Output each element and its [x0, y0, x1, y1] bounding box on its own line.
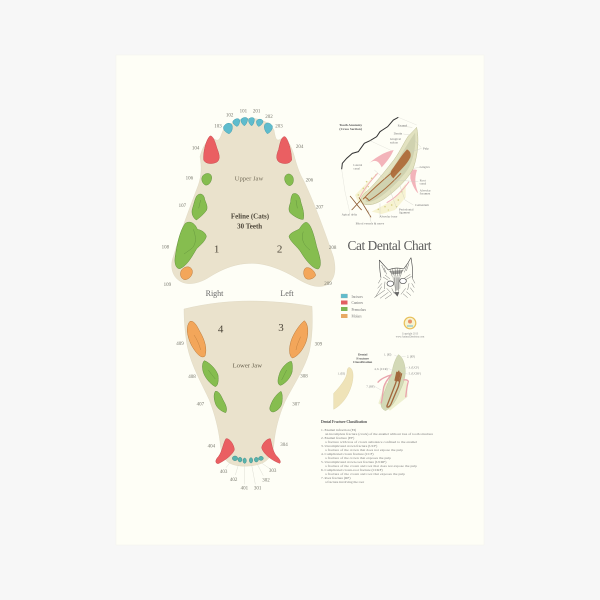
fracture labels: 2. (EF) [407, 355, 415, 359]
premolars green [202, 361, 292, 413]
list items: 6. Complicated crown-root fracture (CCRF) [321, 468, 384, 472]
lower tooth numbers: 309 [315, 342, 323, 347]
upper jaw shape [172, 118, 335, 287]
list items: 1. Enamel infraction (EI) [321, 428, 357, 432]
upper tooth numbers: 104 [192, 146, 200, 151]
anatomy title: (Cross Section) [339, 127, 362, 131]
anatomy labels: Root [420, 178, 426, 182]
upper tooth numbers: 103 [214, 124, 222, 129]
lower tooth numbers: 301 [254, 487, 262, 492]
anatomy labels: Cementum [415, 203, 429, 207]
leader lines [368, 126, 422, 222]
lower tooth numbers: 403 [220, 470, 228, 475]
lower tooth numbers: 307 [292, 403, 300, 408]
fracture tooth [381, 355, 405, 411]
anatomy labels: foramen [420, 192, 431, 196]
anatomy labels [342, 124, 432, 226]
upper tooth numbers [162, 109, 337, 288]
panel: tooth anatomy diagram [339, 117, 432, 226]
upper tooth numbers: 202 [265, 115, 273, 120]
icon: copyright logo [404, 317, 416, 329]
list items: 5. Uncomplicated crown-root fracture (UCRF) [321, 460, 387, 464]
anatomy labels: canal [353, 166, 360, 170]
list items: a fracture of the crown that does not expose the pulp [325, 448, 403, 452]
upper jaw labels: 1 [214, 244, 219, 256]
anatomy labels: Alveolar [420, 188, 432, 192]
leader lines [226, 462, 269, 484]
pulp chamber [391, 149, 411, 178]
lower tooth numbers: 401 [241, 487, 249, 492]
anatomy labels: Pulp [423, 146, 429, 150]
species title: Feline (Cats) [231, 212, 270, 220]
lower tooth numbers: 302 [262, 478, 270, 483]
fracture labels: 5. (UCRF) [409, 372, 421, 376]
lower tooth numbers: 303 [269, 469, 277, 474]
copyright text [396, 332, 424, 338]
anatomy labels: Apical delta [342, 213, 358, 217]
upper jaw labels: 2 [277, 244, 282, 256]
fracture labels [338, 352, 421, 388]
anatomy labels: ligament [399, 211, 410, 215]
label: right side: Right [206, 289, 224, 298]
cat fur strokes [374, 263, 415, 299]
lower jaw shape [184, 301, 312, 466]
text block: fracture classification list [321, 420, 433, 484]
copyright text: Copyright 2013 [402, 332, 419, 336]
fracture labels: 1. (EI) [384, 352, 391, 356]
lower tooth numbers: 308 [300, 375, 308, 380]
copyright text: www.AnimalDentistry.com [396, 336, 424, 338]
anatomy labels: Blood vessels & nerve [356, 222, 385, 226]
list items: an incomplete fracture (crack) of the enamel without loss of tooth structure [325, 432, 433, 436]
cat outline [379, 258, 413, 278]
lower jaw labels: 3 [278, 322, 284, 334]
list items: a fracture of the crown and root that exposes the pulp [325, 472, 405, 476]
panel: upper jaw [162, 109, 337, 288]
fracture bone [378, 380, 408, 411]
root canals [363, 170, 401, 201]
list items: 2. Enamel fracture (EF) [321, 436, 355, 440]
anatomy labels: sulcus [390, 140, 399, 144]
molars 409 and 309 [187, 321, 308, 358]
upper tooth numbers: 201 [253, 109, 261, 114]
fracture title: Dental [358, 353, 367, 357]
poster sheet [116, 55, 484, 545]
teeth: premolars and molars green [175, 173, 320, 269]
lower tooth numbers: 408 [188, 375, 196, 380]
fracture labels: 1. (EI) [338, 371, 345, 375]
upper tooth numbers: 207 [316, 205, 324, 210]
teeth: incisors and premolars 103-203 [223, 117, 272, 134]
lower jaw labels: Lower Jaw [233, 363, 262, 370]
dentin [366, 133, 415, 202]
jagged section line [342, 117, 398, 169]
upper tooth numbers: 109 [164, 283, 172, 288]
legend: tooth types [341, 294, 367, 318]
lower tooth numbers: 407 [197, 403, 205, 408]
upper tooth numbers: 102 [226, 114, 234, 119]
lower tooth numbers: 409 [176, 342, 184, 347]
legend: canines: Canines [352, 301, 364, 305]
dark head band [389, 270, 404, 274]
upper tooth numbers: 101 [240, 109, 248, 114]
lower incisors [232, 456, 263, 463]
anatomy labels: Alveolar bone [379, 214, 398, 218]
upper tooth numbers: 108 [162, 245, 170, 250]
list items: a fracture involving the root [325, 480, 364, 484]
list items: 3. Uncomplicated crown fracture (UCF) [321, 444, 378, 448]
list items: a fracture of the crown and root that does not expose the pulp [325, 464, 417, 468]
bone right [372, 183, 406, 214]
fracture labels: 3. (UCF) [409, 366, 419, 370]
anatomy labels: canal [420, 182, 426, 186]
anatomy labels: Enamel [398, 124, 407, 128]
anatomy labels: Periodontal [399, 207, 414, 211]
upper tooth numbers: 206 [306, 178, 314, 183]
gums [369, 150, 394, 167]
cat nose [394, 292, 399, 296]
anatomy labels: Dentin [394, 132, 403, 136]
fracture labels: 7. (RF) [366, 384, 375, 388]
bone left [355, 172, 378, 203]
list items: a fracture with loss of crown substance confined to the enamel [325, 440, 417, 444]
tooth body [361, 127, 418, 205]
bone speckles [357, 174, 402, 211]
legend: molars: Molars [352, 314, 362, 318]
anatomy labels: Gingival [390, 137, 401, 141]
lower tooth numbers [176, 342, 323, 492]
upper jaw labels: Upper Jaw [235, 175, 264, 182]
anatomy title [339, 123, 362, 131]
cat eyes [387, 281, 394, 286]
fracture labels: 4, 6. (CCR) [374, 367, 388, 371]
list items [321, 428, 433, 484]
lower jaw labels: 4 [218, 323, 224, 335]
gum lining lines [360, 173, 409, 203]
lower jaw labels [218, 322, 284, 370]
icon: cat face sketch [374, 258, 415, 299]
thin outline of section [342, 117, 417, 213]
upper tooth numbers: 203 [275, 125, 283, 130]
upper tooth numbers: 208 [329, 246, 337, 251]
teeth: canines 104 and 204 [204, 136, 292, 164]
cross-section tooth fragment [334, 367, 353, 409]
upper tooth numbers: 204 [296, 145, 304, 150]
fracture title: Classification [353, 360, 372, 364]
upper tooth numbers: 107 [179, 204, 187, 209]
title: Cat Dental Chart [348, 238, 432, 253]
tooth root lines [184, 200, 310, 254]
canines 404 and 304 [216, 439, 280, 464]
list items: 7. Root fracture (RF) [321, 476, 351, 480]
list items: a fracture of the crown that exposes the pulp [325, 456, 391, 460]
list heading: Dental Fracture Classification [321, 420, 368, 424]
list items: 4. Complicated crown fracture (CCF) [321, 452, 374, 456]
anatomy labels: Gingiva [420, 165, 430, 169]
lower tooth numbers: 304 [280, 443, 288, 448]
upper jaw labels [214, 175, 282, 256]
anatomy title: Tooth Anatomy [339, 123, 362, 127]
fracture title: Fracture [356, 356, 369, 360]
gum [378, 375, 391, 403]
upper tooth numbers: 209 [324, 282, 332, 287]
nerve lines [350, 196, 371, 217]
panel: fracture classification diagram [334, 352, 421, 411]
pulp [387, 371, 402, 407]
leader lines [375, 355, 408, 390]
legend: premolars: Premolars [352, 308, 367, 312]
panel: lower jaw [176, 301, 323, 492]
upper jaw labels: 30 Teeth [237, 222, 262, 230]
upper tooth numbers: 106 [186, 177, 194, 182]
legend: incisors: Incisors [352, 295, 363, 299]
anatomy labels: Lateral [353, 163, 362, 167]
fracture title [353, 353, 372, 364]
lower tooth numbers: 402 [230, 478, 238, 483]
teeth: molars 109 and 209 [180, 267, 316, 280]
label: left side: Left [280, 289, 294, 298]
lower tooth numbers: 404 [208, 444, 216, 449]
